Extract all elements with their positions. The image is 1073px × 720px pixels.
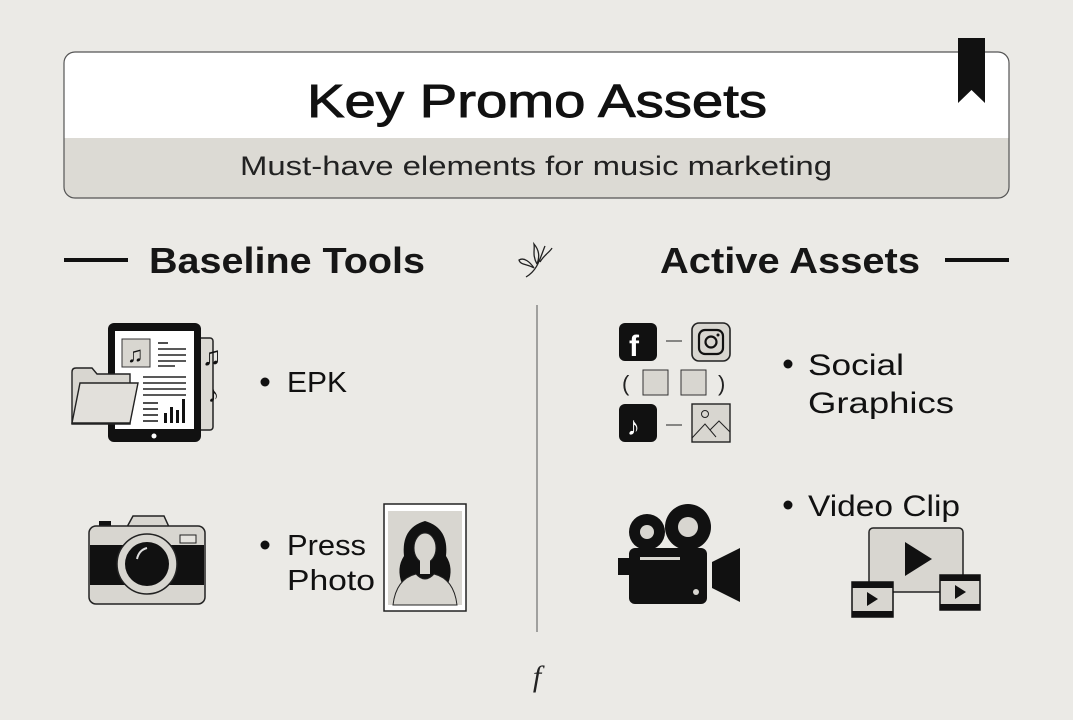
heading: Active Assets: Active Assets	[660, 240, 920, 281]
icon: EPK tablet: ♫	[127, 342, 144, 367]
divider	[536, 305, 538, 632]
icon: video player	[852, 528, 980, 617]
text: Social Graphics: Graphics	[808, 387, 954, 420]
text: EPK: EPK	[287, 367, 348, 399]
icon: portrait	[384, 504, 466, 611]
icon: social grid: f	[629, 330, 640, 363]
icon: bookmark	[958, 38, 985, 103]
text: Video Clip: Video Clip	[808, 490, 960, 523]
text: Press Photo: Photo	[287, 565, 375, 597]
title: Key Promo Assets	[307, 75, 767, 127]
icon: EPK tablet	[72, 323, 222, 442]
icon: social grid: (	[622, 371, 630, 396]
heading: Baseline Tools: Baseline Tools	[149, 240, 425, 281]
icon: social grid: ♪	[627, 411, 640, 441]
icon: EPK tablet: ♫	[202, 341, 222, 371]
text: Press Photo: Press	[287, 530, 366, 562]
text: Social Graphics: Social	[808, 349, 904, 382]
heading: Baseline Tools	[64, 240, 425, 281]
icon: EPK tablet: ♪	[208, 382, 219, 407]
text: Press Photo	[260, 530, 375, 597]
icon: social grid	[619, 323, 730, 442]
icon: social grid: )	[718, 371, 725, 396]
icon: leaf ornament	[519, 244, 552, 277]
text: EPK	[260, 367, 348, 399]
subtitle: Must-have elements for music marketing	[240, 151, 832, 181]
icon: movie camera	[618, 504, 740, 604]
header panel	[64, 52, 1009, 198]
icon: footer f logo: f	[533, 660, 545, 693]
icon: camera	[89, 516, 205, 604]
heading: Active Assets	[660, 240, 1009, 281]
text: Social Graphics	[784, 349, 954, 420]
